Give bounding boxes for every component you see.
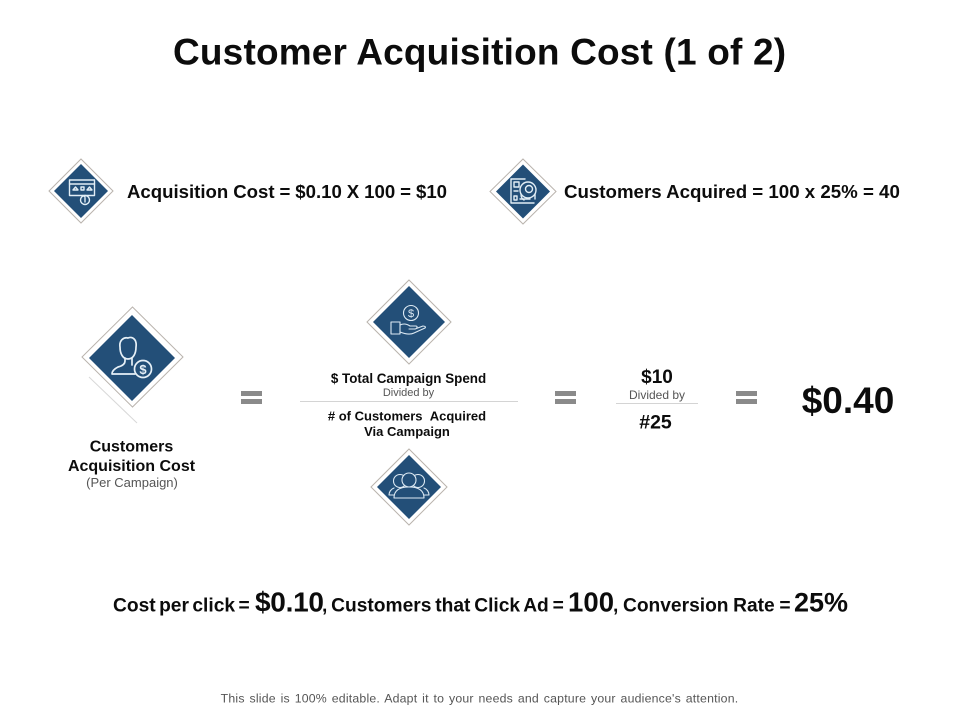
- label: customers acquisition cost: Acquisition Cost: [68, 458, 196, 475]
- footer note: This slide is 100% editable. Adapt it to your needs and capture your audience's attention.: [221, 692, 738, 706]
- icon: customer with dollar diamond: [82, 307, 183, 407]
- denominator text: Via Campaign: [364, 424, 450, 439]
- denominator text: [328, 408, 486, 439]
- icon: customer group diamond: [371, 449, 447, 525]
- result value: $0.40: [802, 380, 894, 421]
- icon: hand with coin diamond: $: [408, 308, 414, 320]
- summary line: 100: [568, 586, 614, 618]
- equals sign 3: [736, 391, 757, 404]
- denominator text: # of Customers Acquired: [328, 408, 486, 424]
- panel: values fraction: [616, 367, 698, 434]
- divided by text: Divided by: [383, 387, 435, 399]
- panel: campaign formula: [300, 280, 518, 525]
- divider line: [300, 400, 518, 402]
- equals sign 2: [555, 391, 576, 404]
- value: $10: $10: [641, 367, 673, 388]
- label: customers acquisition cost: Customers: [90, 438, 173, 456]
- formula text: acquisition cost: Acquisition Cost = $0.10 X 100 = $10: [127, 181, 447, 202]
- panel: customers acquired formula: [490, 159, 900, 224]
- summary line: $0.10: [255, 586, 324, 618]
- icon: customer profile diamond: [490, 159, 556, 224]
- summary line: [113, 586, 848, 618]
- divided by text: Divided by: [629, 388, 685, 402]
- formula text: customers acquired: Customers Acquired = 100 x 25% = 40: [564, 181, 900, 202]
- divider line: [616, 402, 698, 404]
- title: Customer Acquisition Cost (1 of 2): [173, 32, 786, 72]
- label: customers acquisition cost: (Per Campaign): [86, 475, 178, 490]
- summary line: 25%: [794, 588, 848, 618]
- panel: customers acquisition cost: [68, 307, 196, 490]
- icon: customer with dollar diamond: $: [139, 362, 147, 377]
- icon shadow line: [89, 377, 137, 423]
- icon: hand with coin diamond: [367, 280, 451, 364]
- icon: web ad diamond: [49, 159, 113, 223]
- value: #25: #25: [639, 412, 672, 434]
- panel: acquisition cost formula: [49, 159, 447, 223]
- summary line: Cost per click =: [113, 596, 250, 616]
- summary line: , Customers that Click Ad =: [322, 596, 564, 616]
- summary line: , Conversion Rate =: [613, 596, 791, 616]
- label: customers acquisition cost: [68, 438, 196, 490]
- equals sign 1: [241, 391, 262, 404]
- numerator text: $ Total Campaign Spend: [331, 371, 486, 386]
